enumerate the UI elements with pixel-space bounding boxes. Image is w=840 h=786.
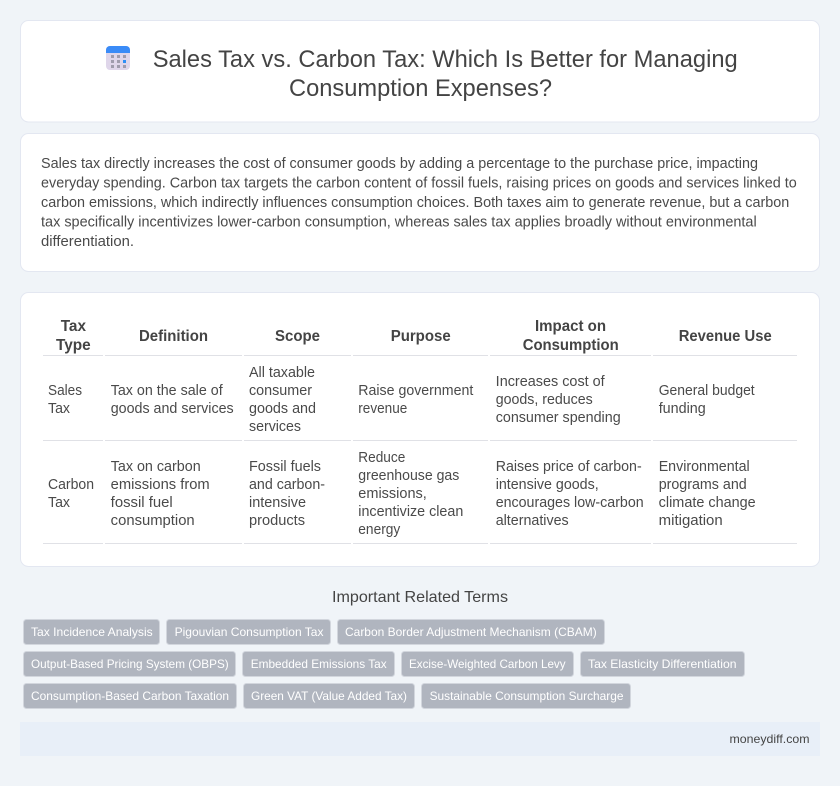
tag: sustainable consumption surcharge <box>422 684 630 708</box>
table row: sales tax: Increases cost of <box>496 374 606 390</box>
table header row: Type <box>56 337 91 354</box>
tag: embedded emissions tax: Embedded Emissions Tax <box>251 657 387 671</box>
table row: sales tax: goods and <box>249 401 316 417</box>
title: Consumption Expenses? <box>289 75 552 102</box>
table row: carbon tax: Tax on carbon <box>111 459 201 475</box>
table row: sales tax: funding <box>659 401 706 417</box>
table row: carbon tax: emissions from <box>111 477 210 493</box>
table header row: Revenue Use <box>679 328 772 345</box>
panel: comparison table <box>20 292 820 566</box>
table row: carbon tax: programs and <box>659 477 747 493</box>
related term tags <box>24 620 744 708</box>
title <box>153 46 738 102</box>
tag: obps <box>24 652 236 676</box>
table row: carbon tax: greenhouse gas <box>358 468 459 484</box>
table row: sales tax: Tax <box>48 401 71 417</box>
summary text <box>41 156 797 250</box>
table row: sales tax: Sales <box>48 383 82 399</box>
tag: excise-weighted carbon levy <box>402 652 574 676</box>
tag: obps: Output-Based Pricing System (OBPS) <box>31 657 229 671</box>
title: Sales Tax vs. Carbon Tax: Which Is Better for Managing <box>153 46 738 73</box>
table header row <box>43 318 797 356</box>
table row: carbon tax: encourages low-carbon <box>496 495 644 511</box>
table header row: Consumption <box>523 337 619 354</box>
table row: sales tax: goods, reduces <box>496 392 593 408</box>
tag: green vat: Green VAT (Value Added Tax) <box>251 689 407 703</box>
summary text: Sales tax directly increases the cost of consumer goods by adding a percentage to the purchase price, impacting <box>41 156 758 172</box>
panel: summary paragraph <box>20 134 820 272</box>
summary text: tax specifically incentivizes lower-carbon consumption, whereas sales tax applies broadly without environmental <box>41 214 757 230</box>
table row: carbon tax: climate change <box>659 495 756 511</box>
summary text: everyday spending. Carbon tax targets the carbon content of fossil fuels, raising prices on goods and services linked to <box>41 176 797 192</box>
table row: sales tax: Raise government <box>358 383 473 399</box>
table row: sales tax: General budget <box>659 383 755 399</box>
table row: sales tax: All taxable <box>249 365 315 381</box>
table header row: Impact on <box>535 318 606 335</box>
table row: sales tax: consumer <box>249 383 312 399</box>
tag: sustainable consumption surcharge: Sustainable Consumption Surcharge <box>430 689 624 703</box>
tag: excise-weighted carbon levy: Excise-Weighted Carbon Levy <box>409 657 566 671</box>
table row: carbon tax: energy <box>358 522 401 538</box>
table row: carbon tax: Fossil fuels <box>249 459 321 475</box>
tag: cbam <box>338 620 604 644</box>
table row: carbon tax: products <box>249 513 305 529</box>
icon: calendar calculator <box>106 46 130 70</box>
tag: pigouvian consumption tax: Pigouvian Consumption Tax <box>175 625 324 639</box>
table row: carbon tax: consumption <box>111 513 195 529</box>
tag: tax incidence analysis: Tax Incidence Analysis <box>31 625 153 639</box>
table row: carbon tax: mitigation <box>659 513 723 529</box>
footer bar <box>20 722 820 756</box>
table row: carbon tax: Carbon <box>48 477 94 493</box>
table row: carbon tax <box>43 450 797 544</box>
table row: sales tax <box>43 365 797 441</box>
tag: embedded emissions tax <box>242 652 394 676</box>
table header row: Purpose <box>391 328 451 345</box>
table header row: Tax <box>61 318 86 335</box>
heading: important related terms: Important Related Terms <box>332 589 508 606</box>
table row: carbon tax: alternatives <box>496 513 569 529</box>
table header row: Scope <box>275 328 320 345</box>
table row: carbon tax: emissions, <box>358 486 427 502</box>
table header row: Definition <box>139 328 208 345</box>
tag: consumption-based carbon taxation <box>24 684 236 708</box>
table row: carbon tax: intensive goods, <box>496 477 599 493</box>
tag: tax incidence analysis <box>24 620 160 644</box>
table row: carbon tax: Raises price of carbon- <box>496 459 642 475</box>
tag: cbam: Carbon Border Adjustment Mechanism (CBAM) <box>345 625 597 639</box>
table row: carbon tax: Environmental <box>659 459 750 475</box>
table row: sales tax: Tax on the sale of <box>111 383 224 399</box>
tag: tax elasticity differentiation <box>580 652 744 676</box>
panel: title card <box>20 20 820 122</box>
table row: sales tax: consumer spending <box>496 410 621 426</box>
table row: sales tax: services <box>249 419 301 435</box>
table row: sales tax: goods and services <box>111 401 234 417</box>
footer source: moneydiff.com <box>730 732 810 746</box>
tag: green vat <box>244 684 414 708</box>
table row: carbon tax: and carbon- <box>249 477 325 493</box>
summary text: differentiation. <box>41 234 134 250</box>
table row: carbon tax: incentivize clean <box>358 504 463 520</box>
tag: consumption-based carbon taxation: Consumption-Based Carbon Taxation <box>31 689 229 703</box>
tag: pigouvian consumption tax <box>166 620 330 644</box>
summary text: carbon emissions, which indirectly influences consumption choices. Both taxes aim to generate revenue, but a carbon <box>41 195 789 211</box>
table row: carbon tax: Tax <box>48 495 71 511</box>
table row: sales tax: revenue <box>358 401 407 417</box>
table row: carbon tax: intensive <box>249 495 306 511</box>
table row: carbon tax: fossil fuel <box>111 495 173 511</box>
table row: carbon tax: Reduce <box>358 450 405 466</box>
tag: tax elasticity differentiation: Tax Elasticity Differentiation <box>588 657 736 671</box>
